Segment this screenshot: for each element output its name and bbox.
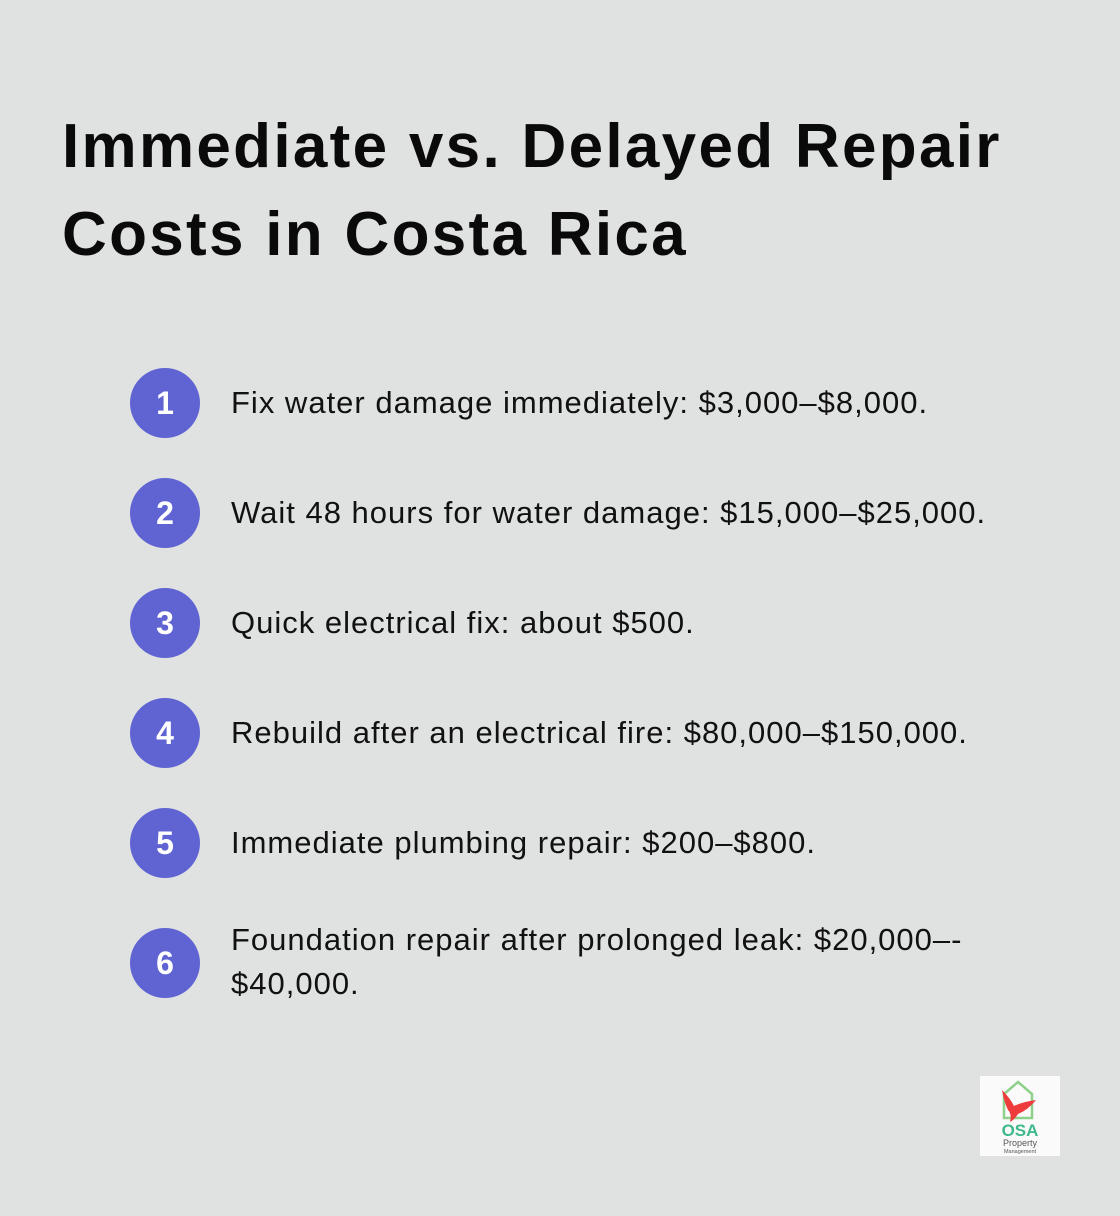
item 3: Quick electrical fix: about $500. — [231, 605, 695, 640]
item 6: 6 — [156, 945, 174, 981]
item 5 — [130, 808, 816, 878]
logo — [980, 1076, 1060, 1156]
item 1: Fix water damage immediately: $3,000–$8,000. — [231, 385, 928, 420]
icon: house — [1004, 1082, 1032, 1118]
item 3 — [130, 588, 695, 658]
item 1: 1 — [156, 385, 174, 421]
item 4: 4 — [156, 715, 174, 751]
item 3: 3 — [156, 605, 174, 641]
title — [62, 112, 1002, 269]
item 2: Wait 48 hours for water damage: $15,000–$25,000. — [231, 495, 986, 530]
item 2 — [130, 478, 986, 548]
item 4 — [130, 698, 968, 768]
item 6: Foundation repair after prolonged leak: $20,000–- — [231, 922, 962, 957]
logo: Management — [1004, 1149, 1037, 1155]
item 2: 2 — [156, 495, 174, 531]
item 1 — [130, 368, 928, 438]
icon: bird — [1002, 1090, 1036, 1122]
item 6: $40,000. — [231, 966, 360, 1001]
title: Costs in Costa Rica — [62, 200, 688, 269]
item 5: 5 — [156, 825, 174, 861]
item 6 — [130, 922, 962, 1001]
item 5: Immediate plumbing repair: $200–$800. — [231, 825, 816, 860]
title: Immediate vs. Delayed Repair — [62, 112, 1002, 181]
item 4: Rebuild after an electrical fire: $80,000–$150,000. — [231, 715, 968, 750]
logo text: OSA — [1002, 1121, 1038, 1140]
logo: Property — [1003, 1138, 1038, 1148]
